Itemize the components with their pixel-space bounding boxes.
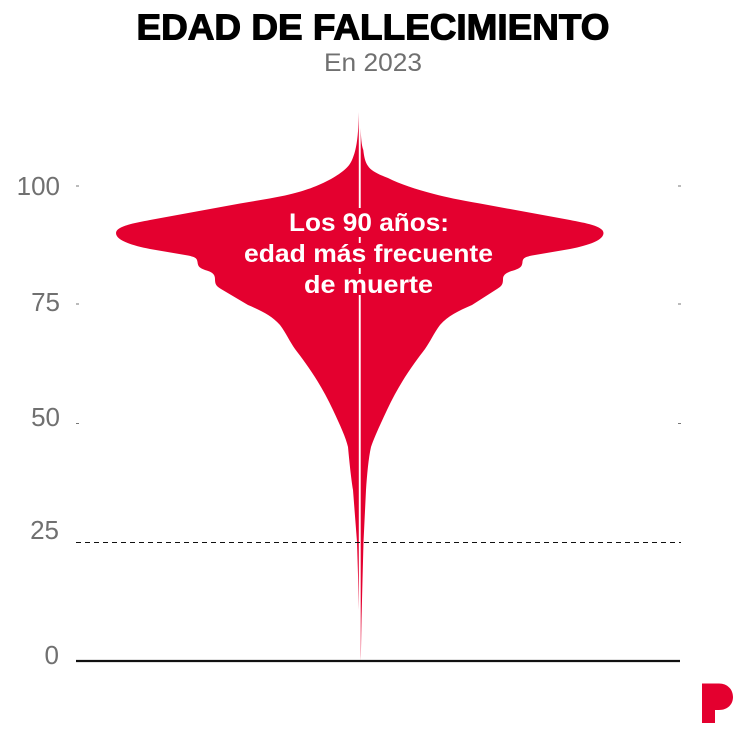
y axis labels bbox=[17, 171, 60, 670]
subtitle: En 2023 bbox=[324, 49, 422, 77]
axis ticks bbox=[76, 186, 681, 424]
title: EDAD DE FALLECIMIENTO bbox=[136, 6, 610, 48]
annotation: de muerte bbox=[304, 271, 433, 299]
logo bbox=[702, 684, 733, 723]
left half of violin bbox=[116, 112, 359, 610]
violin chart: age at death distribution bbox=[116, 112, 604, 661]
y axis labels: 50 bbox=[31, 402, 60, 432]
annotation bbox=[244, 208, 493, 299]
dashed reference line at age 25 bbox=[76, 542, 681, 544]
annotation: edad más frecuente bbox=[244, 240, 493, 268]
y axis labels: 75 bbox=[31, 287, 60, 317]
y axis labels: 100 bbox=[17, 171, 60, 201]
right half of violin bbox=[361, 128, 604, 661]
annotation: Los 90 años: bbox=[289, 209, 449, 237]
baseline at zero bbox=[76, 660, 680, 662]
y axis labels: 25 bbox=[30, 515, 59, 545]
y axis labels: 0 bbox=[45, 640, 59, 670]
